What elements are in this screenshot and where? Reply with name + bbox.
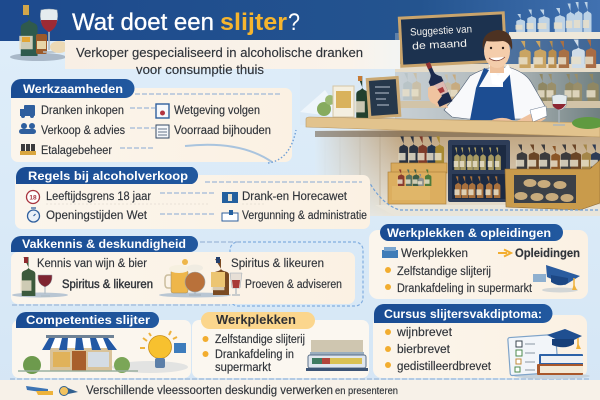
heading: Werkplekken & opleidingen: Werkplekken & opleidingen xyxy=(387,226,551,240)
item: gedistilleerdbrevet: gedistilleerdbrevet xyxy=(397,361,492,373)
chalkboard xyxy=(398,11,507,68)
icon: truck xyxy=(20,105,35,118)
item: Verkoop & advies: Verkoop & advies xyxy=(41,125,125,137)
icon: checklist, books and cap xyxy=(508,329,590,379)
heading: Regels bij alcoholverkoop: Regels bij alcoholverkoop xyxy=(28,169,188,183)
panel: Vakkennis & deskundigheid xyxy=(11,236,363,306)
panel: Werkplekken & opleidingen xyxy=(369,224,588,299)
icon: spirits and glass xyxy=(211,257,242,295)
counter top xyxy=(306,117,600,137)
icon: graduation cap xyxy=(533,265,580,292)
upper shelves xyxy=(509,32,600,39)
panel: Regels bij alcoholverkoop xyxy=(15,167,370,229)
panel: Werkzaamheden xyxy=(11,79,296,163)
item: Drankafdeling in supermarkt: Drankafdeling in xyxy=(215,349,294,361)
item: Proeven & adviseren: Proeven & adviseren xyxy=(245,279,342,291)
dashed path under shelf xyxy=(368,180,600,210)
top shelf bottles xyxy=(515,2,592,32)
panel: footer text strip xyxy=(0,379,600,400)
icon: age 18 xyxy=(26,190,40,204)
title: Wat doet een xyxy=(72,9,214,36)
icon: law document xyxy=(156,104,169,118)
title xyxy=(72,9,300,36)
item: Openingstijden Wet: Openingstijden Wet xyxy=(46,210,148,222)
counter-left items: picture, bottle, board, greens xyxy=(317,76,401,119)
panel: Werkplekken xyxy=(192,312,369,378)
icon: beer and snifter xyxy=(159,259,231,298)
item: Zelfstandige slijterij: Zelfstandige slijterij xyxy=(215,334,305,346)
deli crate xyxy=(505,144,600,210)
panel: Cursus slijtersvakdiploma xyxy=(373,304,590,379)
item: Werkplekken: Werkplekken xyxy=(401,248,468,260)
item: Spiritus & likeuren: Spiritus & likeuren xyxy=(62,279,153,291)
title: ? xyxy=(288,9,300,36)
wine glass xyxy=(552,94,567,125)
item: Leeftijdsgrens 18 jaar: Leeftijdsgrens 18 jaar xyxy=(46,191,151,203)
icon: wine bottle and glass xyxy=(12,257,68,298)
icon: knives xyxy=(26,386,78,396)
item: footer sentence: Verschillende vleessoorten deskundig verwerken xyxy=(86,385,333,397)
heading: Competenties slijter: Competenties slijter xyxy=(26,313,150,327)
item: Voorraad bijhouden: Voorraad bijhouden xyxy=(174,125,271,137)
illustration: shop scene with slijter xyxy=(300,2,600,216)
heading: Cursus slijtersvakdiploma xyxy=(374,304,552,323)
icon: stopwatch xyxy=(28,208,40,222)
heading: Cursus slijtersvakdiploma: Cursus slijtersvakdiptoma: xyxy=(384,307,542,321)
icon: age 18: 18 xyxy=(29,194,37,202)
middle shelf bottles xyxy=(519,40,596,68)
chalkboard: de maand xyxy=(412,38,468,52)
item: Zelfstandige slijterij: Zelfstandige slijterij xyxy=(397,266,491,278)
title: slijter xyxy=(220,9,287,36)
item: Wetgeving volgen: Wetgeving volgen xyxy=(174,105,260,117)
item: Drankafdeling in supermarkt: Drankafdeling in supermarkt xyxy=(397,283,533,295)
salesman xyxy=(430,30,547,128)
item: bierbrevet: bierbrevet xyxy=(397,344,451,356)
counter front xyxy=(315,130,600,216)
item: Spiritus & likeuren (right): Spiritus & likeuren xyxy=(231,258,324,270)
icon: light bulb xyxy=(140,331,186,368)
icon: storefront xyxy=(18,335,138,374)
heading: Regels bij alcoholverkoop xyxy=(16,167,198,184)
greens xyxy=(572,117,600,129)
subtitle xyxy=(65,40,400,77)
icon: law book xyxy=(222,192,238,203)
item: Vergunning & administratie: Vergunning & administratie xyxy=(242,210,367,222)
item: Drankafdeling in supermarkt xyxy=(202,349,294,374)
shelf wall xyxy=(300,33,600,125)
lower shelf bottles xyxy=(402,73,599,101)
heading: Werkzaamheden: Werkzaamheden xyxy=(23,82,123,96)
subtitle: Verkoper gespecialiseerd in alcoholische dranken xyxy=(76,46,363,60)
heading: Werkplekken: Werkplekken xyxy=(216,313,296,327)
item: footer sentence: en presenteren xyxy=(335,386,398,397)
item: Drankafdeling in supermarkt: supermarkt xyxy=(215,362,272,374)
icon: shop scale and shelves xyxy=(306,340,368,371)
icon: bottles display xyxy=(20,144,36,155)
heading: Werkplekken xyxy=(201,312,315,329)
icon: clipboard xyxy=(156,125,169,138)
item: Kennis van wijn & bier: Kennis van wijn & bier xyxy=(37,258,147,270)
item: Dranken inkopen: Dranken inkopen xyxy=(41,105,124,117)
icon: wine bottle and glass xyxy=(10,5,68,61)
top blue band xyxy=(0,0,600,41)
arrow xyxy=(498,250,511,256)
icon: licence xyxy=(222,210,238,221)
panel: Competenties slijter xyxy=(12,312,191,378)
item: wijnbrevet: wijnbrevet xyxy=(396,327,453,339)
icon: people xyxy=(19,123,36,134)
held wine bottle xyxy=(421,60,452,107)
heading: Vakkennis & deskundigheid: Vakkennis & deskundigheid xyxy=(22,237,186,251)
heading: Werkzaamheden xyxy=(11,79,134,98)
icon: workplace xyxy=(382,247,398,258)
chalkboard: Suggestie van xyxy=(410,23,472,39)
item: Drank-en Horecawet: Drank-en Horecawet xyxy=(242,191,348,203)
wine crate xyxy=(388,136,447,204)
item: Etalagebeheer: Etalagebeheer xyxy=(41,145,112,157)
bottle fridge xyxy=(448,140,510,202)
subtitle: voor consumptie thuis xyxy=(136,63,264,77)
holding hand xyxy=(428,86,442,104)
item: Opleidingen: Opleidingen xyxy=(515,248,580,260)
